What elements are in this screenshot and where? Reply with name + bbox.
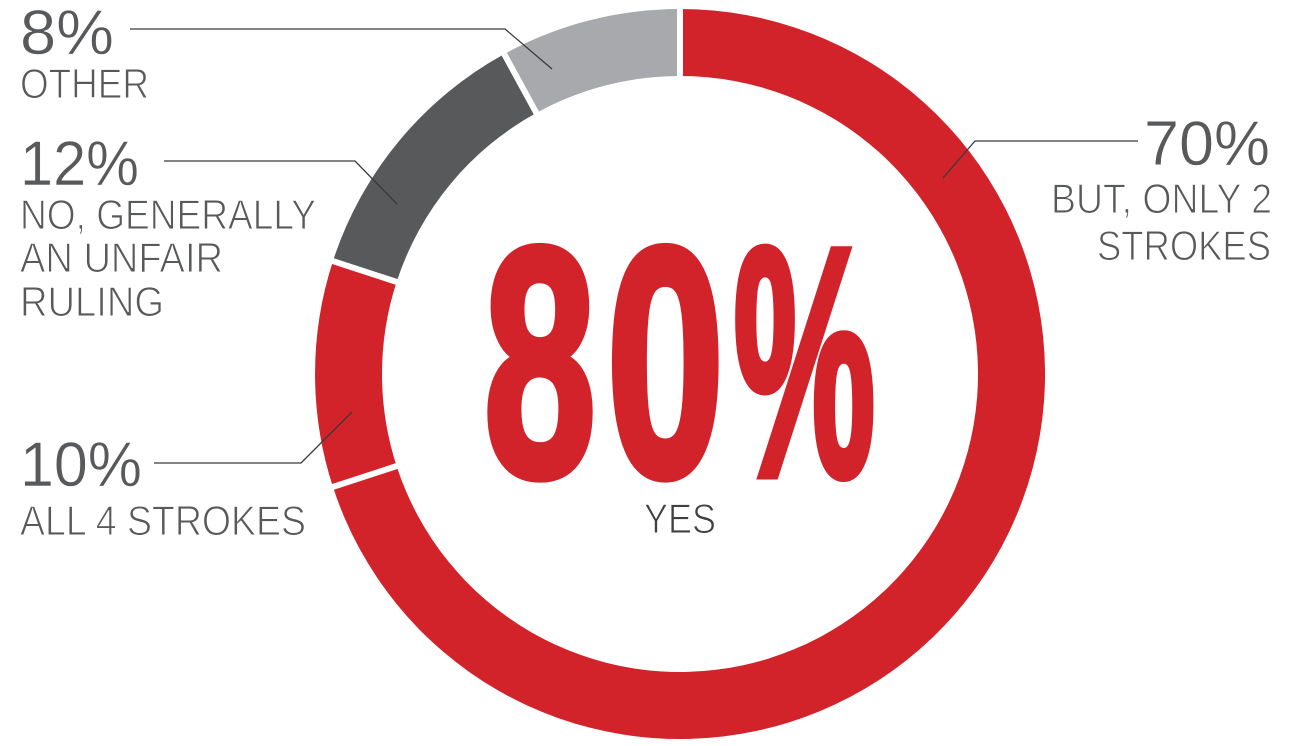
label: 12% no, generally an unfair ruling: RULING [20, 278, 164, 325]
label: 10% all 4 strokes [20, 430, 306, 544]
center value: 80% [484, 181, 875, 545]
label: 12% no, generally an unfair ruling: NO, GENERALLY [20, 191, 316, 238]
center label: yes: YES [644, 495, 716, 542]
label: 12% no, generally an unfair ruling: AN UNFAIR [20, 234, 223, 281]
donut chart [315, 4, 1045, 739]
label: 70% but, only 2 strokes [1051, 109, 1272, 269]
leader lines [130, 29, 1138, 463]
label: 8% other: 8% [20, 0, 114, 68]
label: 8% other: OTHER [20, 60, 149, 107]
label: 70% but, only 2 strokes: STROKES [1097, 222, 1271, 269]
label: 12% no, generally an unfair ruling: 12% [20, 129, 139, 199]
label: 12% no, generally an unfair ruling [20, 129, 316, 325]
segment: 10% all 4 strokes [315, 261, 397, 487]
center value: 80%: 8 [484, 181, 596, 545]
label: 70% but, only 2 strokes: 70% [1144, 109, 1270, 179]
label: 70% but, only 2 strokes: BUT, ONLY 2 [1051, 175, 1272, 222]
center value: 80%: 0 [606, 181, 724, 545]
center value: 80%: % [733, 182, 875, 545]
segment: 12% no, generally an unfair ruling [333, 54, 536, 282]
label: 10% all 4 strokes: 10% [20, 430, 142, 500]
segment: 8% other [504, 9, 680, 113]
segment: 70% but only 2 strokes [333, 9, 1045, 739]
label: 8% other [20, 0, 149, 107]
label: 10% all 4 strokes: ALL 4 STROKES [20, 497, 306, 544]
